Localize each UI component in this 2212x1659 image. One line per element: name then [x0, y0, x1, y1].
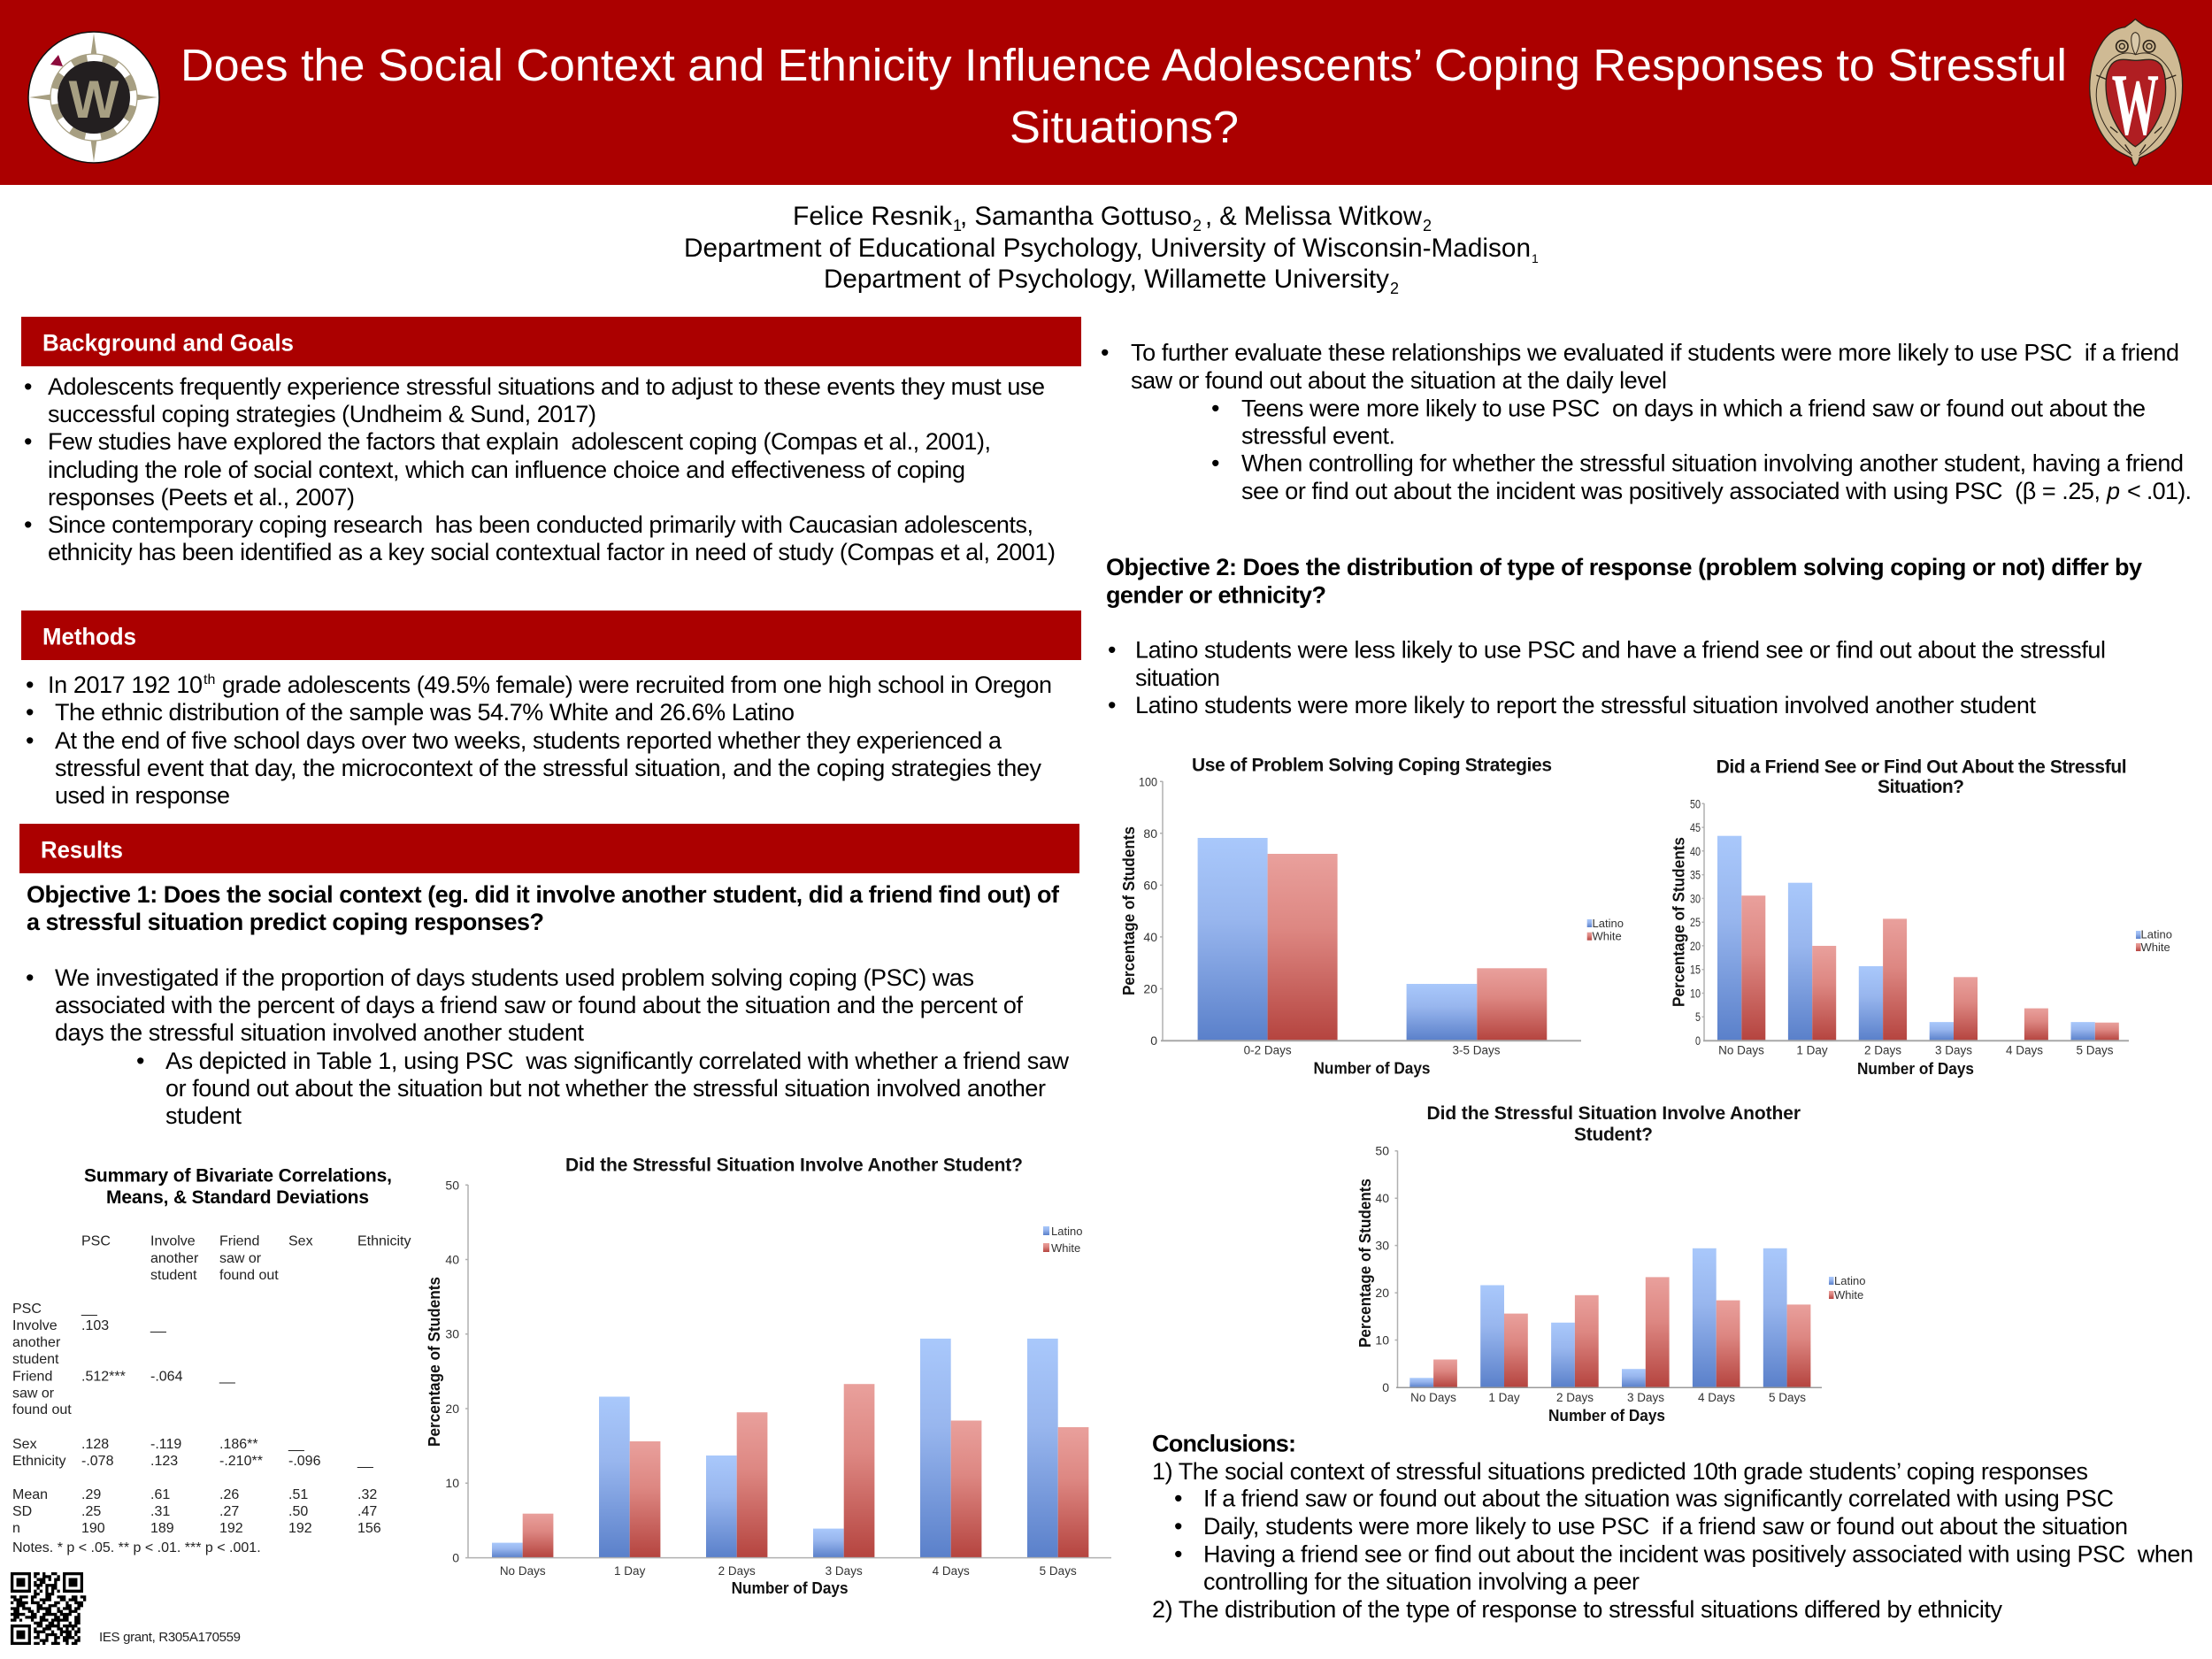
- title: Situations?: [1010, 102, 1239, 152]
- text block: objective 2 bullets: situation: [1135, 664, 1220, 691]
- table rows: __: [150, 1318, 167, 1333]
- heading: background and goals: [21, 317, 1081, 366]
- y axis: 20: [445, 1402, 459, 1416]
- chart title: Did the Stressful Situation Involve Another Student?: [565, 1155, 1023, 1175]
- x axis: 4 Days: [1698, 1391, 1735, 1404]
- text block: friend saw or found out at daily level: < .01).: [2127, 478, 2192, 504]
- chart: did the stressful situation involve another student (large): [426, 1155, 1111, 1597]
- text block: objective 2 bullets: •: [1108, 692, 1116, 718]
- table rows: .128: [81, 1437, 109, 1452]
- y axis: 25: [1690, 915, 1701, 929]
- text block: conclusions list: Having a friend see or find out about the incident was positively associated with using PSC when: [1203, 1541, 2193, 1568]
- text block: background bullets: Adolescents frequently experience stressful situations and to adjust to these events they must use: [48, 373, 1045, 400]
- title: [180, 40, 2067, 152]
- legend: White: [2141, 941, 2170, 954]
- legend: White: [1834, 1288, 1863, 1302]
- authors and affiliations: [684, 202, 1539, 297]
- bars: Latino: [492, 1339, 1058, 1557]
- y axis: 80: [1143, 826, 1157, 841]
- subheading: objective 2: gender or ethnicity?: [1106, 582, 1326, 609]
- text block: methods bullets: •: [26, 672, 34, 698]
- table rows: 192: [288, 1521, 312, 1536]
- table column headers: saw or: [219, 1251, 262, 1266]
- y axis: 30: [445, 1327, 459, 1341]
- chart title: Situation?: [1878, 777, 1964, 797]
- table rows: 190: [81, 1521, 105, 1536]
- x axis: 5 Days: [2076, 1044, 2114, 1057]
- y axis: 0: [452, 1550, 459, 1564]
- chart: did the stressful situation involve another student (small): [1356, 1103, 1865, 1425]
- y axis: 50: [445, 1178, 459, 1192]
- table column headers: Friend: [219, 1233, 259, 1249]
- table rows: -.119: [150, 1437, 181, 1452]
- table rows: saw or: [12, 1386, 55, 1402]
- text block: objective 1 bullets: •: [136, 1048, 144, 1074]
- table column headers: PSC: [81, 1233, 111, 1249]
- text block: conclusions list: If a friend saw or found out about the situation was significantly correlated with using PSC: [1203, 1485, 2114, 1511]
- chart title: [1717, 757, 2127, 797]
- grant note: IES grant, R305A170559: [99, 1630, 241, 1645]
- text block: friend saw or found out at daily level: •: [1211, 449, 1219, 476]
- subheading: objective 2: Objective 2: Does the distribution of type of response (problem solving coping or not) differ by: [1106, 554, 2142, 580]
- y axis: 10: [1690, 986, 1701, 1000]
- y axis: 20: [1375, 1286, 1389, 1300]
- legend: Latino: [1834, 1274, 1865, 1287]
- subheading: objective 2: [1106, 554, 2142, 609]
- y axis: [1671, 796, 1704, 1048]
- text block: background bullets: •: [24, 428, 32, 455]
- authors and affiliations: 2: [1193, 217, 1202, 234]
- legend: [1043, 1225, 1082, 1255]
- legend: [2136, 928, 2172, 954]
- x axis: Number of Days: [1857, 1060, 1974, 1078]
- x axis: 1 Day: [1796, 1044, 1828, 1057]
- table rows: .186**: [219, 1437, 258, 1452]
- y axis: 0: [1695, 1033, 1701, 1048]
- y axis: 10: [1375, 1333, 1389, 1347]
- text block: conclusions list: •: [1174, 1485, 1182, 1511]
- chart: use of problem solving coping strategies: [1120, 756, 1624, 1078]
- icon: QR code: [11, 1574, 86, 1643]
- text block: conclusions list: [1152, 1458, 2193, 1623]
- text block: friend saw or found out at daily level: see or find out about the incident was positively associated with using PSC (β = .25,: [1241, 478, 2101, 504]
- table rows: .512***: [81, 1370, 126, 1384]
- chart title: Student?: [1574, 1125, 1653, 1145]
- text block: objective 1 bullets: associated with the percent of days a friend saw or found about the situation and the percent of: [55, 992, 1023, 1018]
- text block: objective 1 bullets: student: [165, 1102, 242, 1129]
- table rows: __: [288, 1437, 305, 1452]
- table rows: __: [357, 1454, 374, 1469]
- y axis: 40: [1690, 844, 1701, 858]
- table rows: 156: [357, 1521, 381, 1536]
- authors and affiliations: , Samantha Gottuso: [960, 202, 1192, 231]
- chart title: Did a Friend See or Find Out About the Stressful: [1717, 757, 2127, 777]
- y axis: 20: [1143, 982, 1157, 996]
- bars: White: [1433, 1277, 1810, 1387]
- table rows: 192: [219, 1521, 243, 1536]
- text block: methods bullets: The ethnic distribution of the sample was 54.7% White and 26.6% Latino: [55, 699, 795, 726]
- chart title: Did the Stressful Situation Involve Another: [1426, 1103, 1801, 1124]
- y axis: Percentage of Students: [426, 1277, 443, 1447]
- table rows: .50: [288, 1504, 308, 1519]
- authors and affiliations: , & Melissa Witkow: [1205, 202, 1422, 231]
- x axis: [1703, 1041, 2129, 1078]
- text block: conclusions list: •: [1174, 1513, 1182, 1540]
- text block: background bullets: responses (Peets et al., 2007): [48, 484, 355, 511]
- icon: compass logo: W: [69, 70, 119, 129]
- header banner: [0, 0, 2212, 185]
- y axis: 45: [1690, 820, 1701, 834]
- text block: objective 2 bullets: Latino students were less likely to use PSC and have a friend see or find out about the stressful: [1135, 637, 2106, 664]
- subheading: objective 1: a stressful situation predict coping responses?: [27, 909, 544, 935]
- table rows: -.078: [81, 1454, 114, 1469]
- x axis: [465, 1558, 1111, 1597]
- y axis: 10: [445, 1476, 459, 1490]
- text block: methods bullets: In 2017 192 10: [48, 672, 203, 698]
- table rows: Ethnicity: [12, 1454, 65, 1469]
- x axis: 1 Day: [614, 1564, 646, 1578]
- text block: objective 2 bullets: •: [1108, 637, 1116, 664]
- text block: friend saw or found out at daily level: saw or found out about the situation at the daily level: [1131, 367, 1667, 394]
- x axis: Number of Days: [1313, 1060, 1430, 1078]
- icon: university crest: [2090, 19, 2183, 165]
- text block: methods bullets: stressful event that day, the microcontext of the stressful situation, and the coping strategies they: [55, 755, 1042, 781]
- chart title: [1426, 1103, 1801, 1145]
- text block: objective 1 bullets: •: [26, 964, 34, 991]
- x axis: 3 Days: [1935, 1044, 1972, 1057]
- text block: background bullets: [24, 373, 1056, 565]
- x axis: 3-5 Days: [1452, 1044, 1501, 1057]
- table rows: -.064: [150, 1370, 183, 1384]
- text block: background bullets: •: [24, 373, 32, 400]
- y axis: 0: [1150, 1033, 1157, 1048]
- text block: friend saw or found out at daily level: •: [1211, 395, 1219, 421]
- table rows: -.210**: [219, 1454, 263, 1469]
- authors and affiliations: 2: [1423, 217, 1432, 234]
- chart title: Use of Problem Solving Coping Strategies: [1192, 756, 1552, 776]
- bars: White: [523, 1384, 1088, 1557]
- table column headers: Sex: [288, 1233, 313, 1249]
- y axis: 15: [1690, 963, 1701, 977]
- legend: Latino: [1593, 917, 1624, 930]
- x axis: [1161, 1041, 1581, 1078]
- text block: methods bullets: •: [26, 699, 34, 726]
- text block: background bullets: Since contemporary coping research has been conducted primarily with Caucasian adolescents,: [48, 511, 1033, 538]
- authors and affiliations: Department of Psychology, Willamette University: [824, 265, 1389, 294]
- authors and affiliations: 2: [1390, 280, 1399, 297]
- text block: objective 1 bullets: As depicted in Table 1, using PSC was significantly correlated with whether a friend saw: [165, 1048, 1069, 1074]
- x axis: Number of Days: [732, 1579, 849, 1597]
- table rows: Involve: [12, 1318, 58, 1333]
- authors and affiliations: Department of Educational Psychology, University of Wisconsin-Madison: [684, 234, 1531, 263]
- text block: objective 2 bullets: [1108, 637, 2106, 718]
- text block: conclusions list: controlling for the situation involving a peer: [1203, 1568, 1640, 1594]
- text block: background bullets: ethnicity has been identified as a key social contextual factor in need of study (Compas et al, 2001): [48, 539, 1056, 565]
- text block: methods bullets: [26, 672, 1052, 809]
- icon: compass logo: [28, 32, 159, 163]
- text block: conclusions list: Daily, students were more likely to use PSC if a friend saw or found out about the situation: [1203, 1513, 2128, 1540]
- x axis: 0-2 Days: [1244, 1044, 1292, 1057]
- table column headers: Involve: [150, 1233, 196, 1249]
- table rows: .123: [150, 1454, 178, 1469]
- x axis: No Days: [1718, 1044, 1764, 1057]
- table rows: .32: [357, 1487, 377, 1502]
- y axis: 60: [1143, 878, 1157, 892]
- y axis: 40: [445, 1253, 459, 1267]
- y axis: 20: [1690, 939, 1701, 953]
- y axis: 40: [1143, 930, 1157, 944]
- text block: friend saw or found out at daily level: p: [2106, 478, 2120, 504]
- table notes: Notes. * p < .05. ** p < .01. *** p < .001.: [12, 1540, 261, 1555]
- authors and affiliations: 1: [953, 217, 962, 234]
- text block: friend saw or found out at daily level: When controlling for whether the stressful situation involving another student, having a friend: [1241, 449, 2184, 476]
- table column headers: found out: [219, 1268, 279, 1283]
- table rows: .103: [81, 1318, 109, 1333]
- subheading: objective 1: Objective 1: Does the social context (eg. did it involve another student, did a friend find out) of: [27, 881, 1060, 908]
- y axis: 50: [1375, 1144, 1389, 1158]
- panel: methods: [21, 611, 1081, 809]
- text block: friend saw or found out at daily level: To further evaluate these relationships we evaluated if students were more likely to use PSC if a friend: [1131, 340, 2179, 366]
- heading: results: Results: [41, 837, 123, 864]
- table column headers: student: [150, 1268, 197, 1283]
- table column headers: [81, 1233, 411, 1283]
- heading: results: [19, 824, 1079, 873]
- table column headers: Ethnicity: [357, 1233, 411, 1249]
- text block: friend saw or found out at daily level: [1101, 340, 2192, 504]
- heading: background and goals: Background and Goals: [42, 329, 294, 356]
- table rows: -.096: [288, 1454, 321, 1469]
- x axis: 2 Days: [718, 1564, 756, 1578]
- y axis: 30: [1690, 891, 1701, 905]
- text block: friend saw or found out at daily level: stressful event.: [1241, 423, 1395, 449]
- table rows: .51: [288, 1487, 308, 1502]
- y axis: 50: [1690, 796, 1701, 810]
- y axis: 0: [1382, 1380, 1389, 1394]
- y axis: [426, 1178, 468, 1564]
- y axis: 40: [1375, 1191, 1389, 1205]
- y axis: [1120, 774, 1163, 1048]
- text block: objective 1 bullets: [26, 964, 1069, 1129]
- text block: conclusions list: 2) The distribution of the type of response to stressful situations differed by ethnicity: [1152, 1596, 2003, 1623]
- x axis: [1396, 1387, 1822, 1425]
- y axis: Percentage of Students: [1356, 1179, 1374, 1348]
- table rows: __: [219, 1370, 236, 1384]
- icon: university crest: W: [2112, 56, 2159, 154]
- x axis: 4 Days: [2006, 1044, 2043, 1057]
- table rows: PSC: [12, 1302, 42, 1317]
- bars: Latino: [1198, 838, 1477, 1041]
- table rows: SD: [12, 1504, 32, 1519]
- table rows: [12, 1302, 381, 1536]
- table rows: .47: [357, 1504, 377, 1519]
- table rows: n: [12, 1521, 20, 1536]
- y axis: [1356, 1144, 1398, 1394]
- table rows: .27: [219, 1504, 239, 1519]
- legend: White: [1051, 1241, 1080, 1255]
- table rows: .61: [150, 1487, 170, 1502]
- table rows: .29: [81, 1487, 101, 1502]
- x axis: 2 Days: [1864, 1044, 1901, 1057]
- text block: background bullets: Few studies have explored the factors that explain adolescent coping (Compas et al., 2001),: [48, 428, 991, 455]
- x axis: 3 Days: [826, 1564, 863, 1578]
- text block: friend saw or found out at daily level: Teens were more likely to use PSC on days in which a friend saw or found out about the: [1241, 395, 2146, 421]
- x axis: No Days: [1410, 1391, 1456, 1404]
- text block: objective 1 bullets: We investigated if the proportion of days students used problem solving coping (PSC) was: [55, 964, 974, 991]
- y axis: Percentage of Students: [1671, 837, 1688, 1007]
- bars: White: [1741, 895, 2119, 1041]
- text block: methods bullets: th: [204, 672, 215, 687]
- subheading: objective 1: [27, 881, 1060, 935]
- table rows: found out: [12, 1402, 72, 1417]
- x axis: 3 Days: [1627, 1391, 1664, 1404]
- table rows: .31: [150, 1504, 170, 1519]
- x axis: 2 Days: [1556, 1391, 1594, 1404]
- title: Does the Social Context and Ethnicity Influence Adolescents’ Coping Responses to Stressful: [180, 40, 2067, 90]
- y axis: 35: [1690, 868, 1701, 882]
- table rows: .26: [219, 1487, 239, 1502]
- heading: methods: Methods: [42, 623, 136, 649]
- x axis: 5 Days: [1769, 1391, 1806, 1404]
- text block: objective 2 bullets: Latino students were more likely to report the stressful situation involved another student: [1135, 692, 2036, 718]
- legend: White: [1593, 930, 1622, 943]
- bars: Latino: [1717, 836, 2095, 1041]
- text block: background bullets: successful coping strategies (Undheim & Sund, 2017): [48, 401, 596, 427]
- panel: background and goals: [21, 317, 1081, 565]
- table title: Means, & Standard Deviations: [106, 1187, 369, 1208]
- text block: methods bullets: At the end of five school days over two weeks, students reported whether they experienced a: [55, 727, 1002, 754]
- table title: Summary of Bivariate Correlations,: [84, 1166, 392, 1186]
- y axis: 5: [1695, 1010, 1701, 1024]
- legend: Latino: [1051, 1225, 1082, 1238]
- text block: background bullets: including the role of social context, which can influence choice and effectiveness of coping: [48, 457, 965, 483]
- authors and affiliations: Felice Resnik: [793, 202, 953, 231]
- heading: methods: [21, 611, 1081, 660]
- text block: objective 1 bullets: or found out about the situation but not whether the stressful situation involved another: [165, 1075, 1046, 1102]
- text block: methods bullets: •: [26, 727, 34, 754]
- chart: did a friend see or find out: [1671, 757, 2172, 1078]
- text block: methods bullets: grade adolescents (49.5% female) were recruited from one high school in Oregon: [222, 672, 1052, 698]
- panel: conclusions: [1152, 1430, 2193, 1623]
- table rows: student: [12, 1352, 59, 1367]
- text block: objective 1 bullets: days the stressful situation involved another student: [55, 1019, 584, 1046]
- y axis: Percentage of Students: [1120, 826, 1138, 995]
- x axis: Number of Days: [1548, 1407, 1665, 1425]
- panel: results objective 1: [19, 824, 1079, 1129]
- bars: White: [1268, 854, 1547, 1041]
- table rows: another: [12, 1335, 61, 1350]
- table title: [84, 1166, 392, 1208]
- text block: methods bullets: used in response: [55, 782, 230, 809]
- text block: conclusions list: 1) The social context of stressful situations predicted 10th grade students’ coping responses: [1152, 1458, 2088, 1485]
- x axis: 5 Days: [1040, 1564, 1077, 1578]
- table rows: 189: [150, 1521, 174, 1536]
- table rows: .25: [81, 1504, 101, 1519]
- legend: Latino: [2141, 928, 2172, 941]
- table rows: __: [81, 1302, 98, 1317]
- table column headers: another: [150, 1251, 199, 1266]
- y axis: 100: [1139, 774, 1157, 788]
- legend: [1829, 1274, 1865, 1302]
- y axis: 30: [1375, 1239, 1389, 1253]
- text block: background bullets: •: [24, 511, 32, 538]
- table: summary of bivariate correlations: [12, 1166, 411, 1555]
- bars: Latino: [1409, 1248, 1787, 1387]
- legend: [1587, 917, 1624, 943]
- heading: conclusions: Conclusions:: [1152, 1430, 1296, 1456]
- text block: conclusions list: •: [1174, 1541, 1182, 1568]
- x axis: 4 Days: [933, 1564, 970, 1578]
- x axis: 1 Day: [1488, 1391, 1520, 1404]
- x axis: No Days: [500, 1564, 546, 1578]
- authors and affiliations: 1: [1532, 251, 1539, 265]
- table rows: Friend: [12, 1370, 52, 1384]
- text block: friend saw or found out at daily level: •: [1101, 340, 1109, 366]
- table rows: Mean: [12, 1487, 48, 1502]
- table rows: Sex: [12, 1437, 37, 1452]
